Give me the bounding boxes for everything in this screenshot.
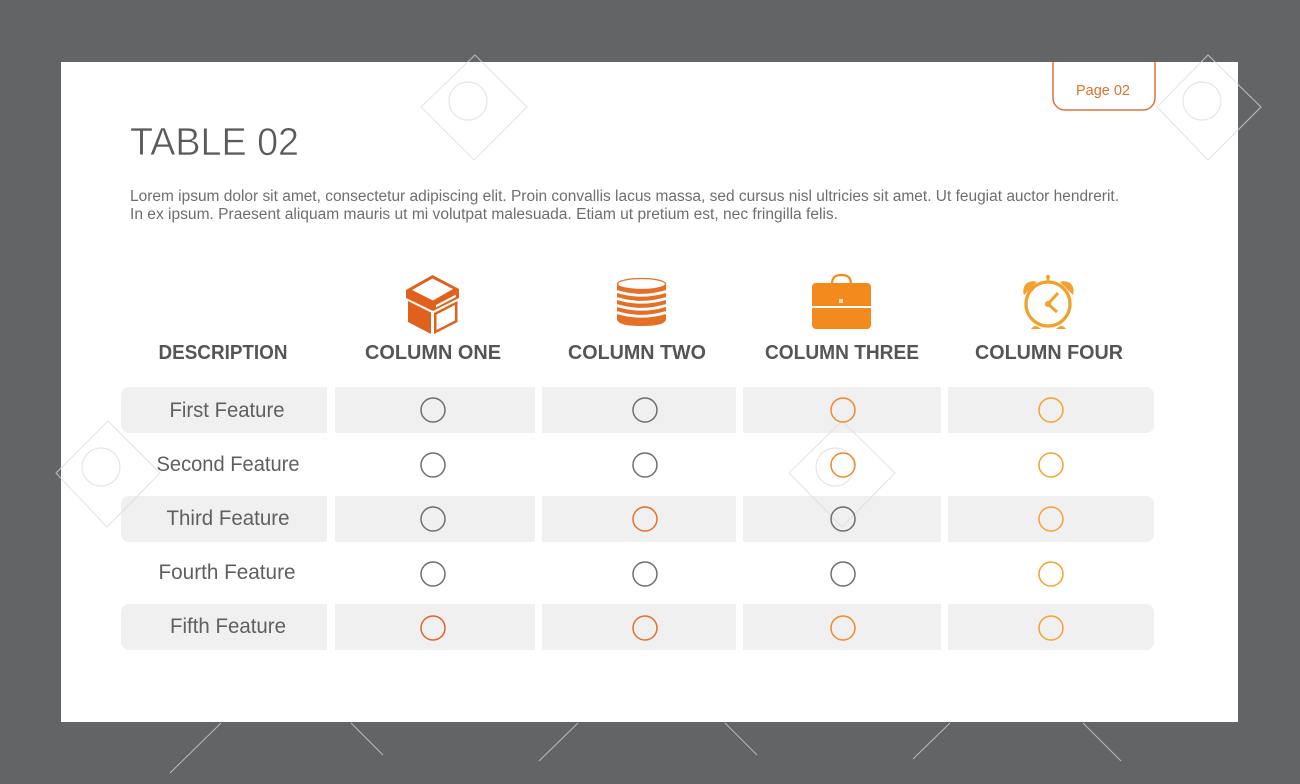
icon: briefcase (812, 275, 871, 329)
row labels: Fourth Feature (158, 561, 296, 584)
icon: box (406, 275, 459, 334)
table headings: COLUMN THREE (765, 342, 919, 364)
panel: page tab: Page 02 (1076, 82, 1130, 99)
icon: alarm clock (1023, 275, 1074, 329)
text block: intro: In ex ipsum. Praesent aliquam mauris ut mi volutpat malesuada. Etiam ut pretium est, nec fringilla felis. (130, 206, 838, 223)
markers: column three (831, 398, 855, 640)
icon: coin stack (617, 278, 666, 326)
title: TABLE 02 (130, 121, 299, 164)
table headings: DESCRIPTION (158, 342, 288, 364)
table headings (158, 342, 1124, 364)
table row backgrounds (121, 387, 1154, 650)
markers: column two (633, 398, 657, 640)
row labels: Second Feature (156, 453, 300, 476)
row labels: Third Feature (166, 507, 290, 530)
table headings: COLUMN FOUR (975, 342, 1124, 364)
text block: intro (130, 188, 1119, 223)
panel: page tab (1053, 62, 1155, 110)
markers: column four (1039, 398, 1063, 640)
table headings: COLUMN ONE (365, 342, 501, 364)
row labels (156, 399, 300, 638)
text block: intro: Lorem ipsum dolor sit amet, consectetur adipiscing elit. Proin convallis lacus massa, sed cursus nisl ultricies sit amet. Ut feugiat auctor hendrerit. (130, 188, 1119, 205)
markers: column one (421, 398, 445, 640)
row labels: First Feature (170, 399, 284, 422)
table headings: COLUMN TWO (568, 342, 706, 364)
row labels: Fifth Feature (170, 615, 286, 638)
